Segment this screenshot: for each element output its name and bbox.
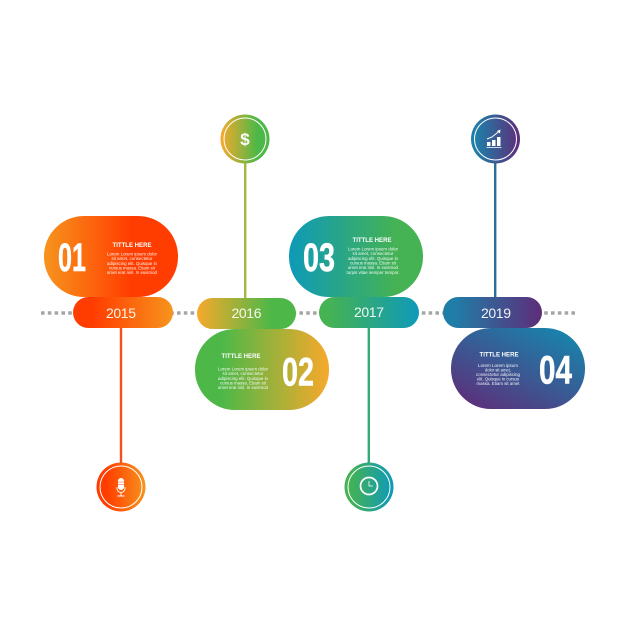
number 02: 02 xyxy=(282,350,314,394)
panel: 02 xyxy=(195,329,329,410)
dotted timeline axis xyxy=(41,311,577,315)
body text 01: amet erat nisl. In euismod xyxy=(107,270,157,275)
body text 04: dolor sit amet, xyxy=(485,368,511,372)
body text 02: adipiscing elit. Quisque in xyxy=(218,376,268,381)
body text 01: Lorem Lorem ipsum dolor xyxy=(107,252,157,256)
heading 02: TITTLE HERE xyxy=(222,353,260,360)
heading 04: TITTLE HERE xyxy=(480,352,518,358)
number 04: 04 xyxy=(539,348,573,392)
year pill 2016: 2016 xyxy=(232,305,262,321)
body text 03: turpis vitae semper tempor. xyxy=(346,270,400,275)
panel: 04 xyxy=(451,328,585,409)
year pill 2015: 2015 xyxy=(106,305,136,321)
body text 03: amet erat nisl. In euismod xyxy=(348,265,398,270)
connector line 2019 xyxy=(494,160,496,300)
body text 04 xyxy=(476,363,520,386)
milestone 2016 xyxy=(195,114,329,410)
connector line 2016 xyxy=(244,160,246,300)
body text 01: cursus massa. Etiam sit xyxy=(109,266,156,270)
year pill 2017 xyxy=(319,297,419,328)
icon: clock xyxy=(344,462,394,512)
number 03: 03 xyxy=(303,236,335,280)
heading 01: TITTLE HERE xyxy=(112,242,152,249)
heading 03: TITTLE HERE xyxy=(352,237,392,244)
icon: dollar xyxy=(220,114,270,164)
body text 02 xyxy=(218,366,268,390)
body text 02: sit amet, consectetur xyxy=(222,371,264,376)
body text 02: cursus massa. Etiam sit xyxy=(220,380,267,386)
number 01: 01 xyxy=(58,236,86,280)
milestone 2017 xyxy=(289,216,423,512)
year pill 2016 xyxy=(197,298,296,329)
body text 03: adipiscing elit. Quisque in xyxy=(348,256,398,261)
body text 04: elit. Quisque in cursus xyxy=(477,376,520,382)
body text 03: sit amet, consectetur xyxy=(352,251,394,256)
icon: microphone xyxy=(96,462,146,512)
body text 02: Lorem Lorem ipsum dolor xyxy=(218,366,268,372)
body text 02: amet erat nisl. In euismod xyxy=(218,385,268,390)
milestone 2019 xyxy=(443,114,585,409)
icon: growth chart xyxy=(471,114,520,164)
connector line 2015 xyxy=(120,326,122,464)
body text 04: massa. Etiam sit amet xyxy=(476,381,520,386)
milestone 2015 xyxy=(44,216,178,512)
icon: dollar: $ xyxy=(240,130,250,149)
body text 03: cursus massa. Etiam sit xyxy=(350,260,397,266)
body text 04: Lorem Lorem ipsum xyxy=(478,363,518,368)
body text 03 xyxy=(346,246,400,275)
year pill 2015 xyxy=(73,297,173,328)
body text 01 xyxy=(107,252,157,275)
body text 03: Lorem Lorem ipsum dolor xyxy=(348,246,398,252)
body text 04: consectetur adipiscing xyxy=(476,372,520,377)
connector line 2017 xyxy=(368,326,370,464)
body text 01: sit amet, consectetur xyxy=(112,256,153,261)
year pill 2019 xyxy=(443,297,542,328)
year pill 2019: 2019 xyxy=(481,305,511,321)
panel: 01 xyxy=(44,216,178,297)
year pill 2017: 2017 xyxy=(354,304,384,320)
panel: 03 xyxy=(289,216,423,297)
body text 01: adipiscing elit. Quisque in xyxy=(107,261,157,266)
